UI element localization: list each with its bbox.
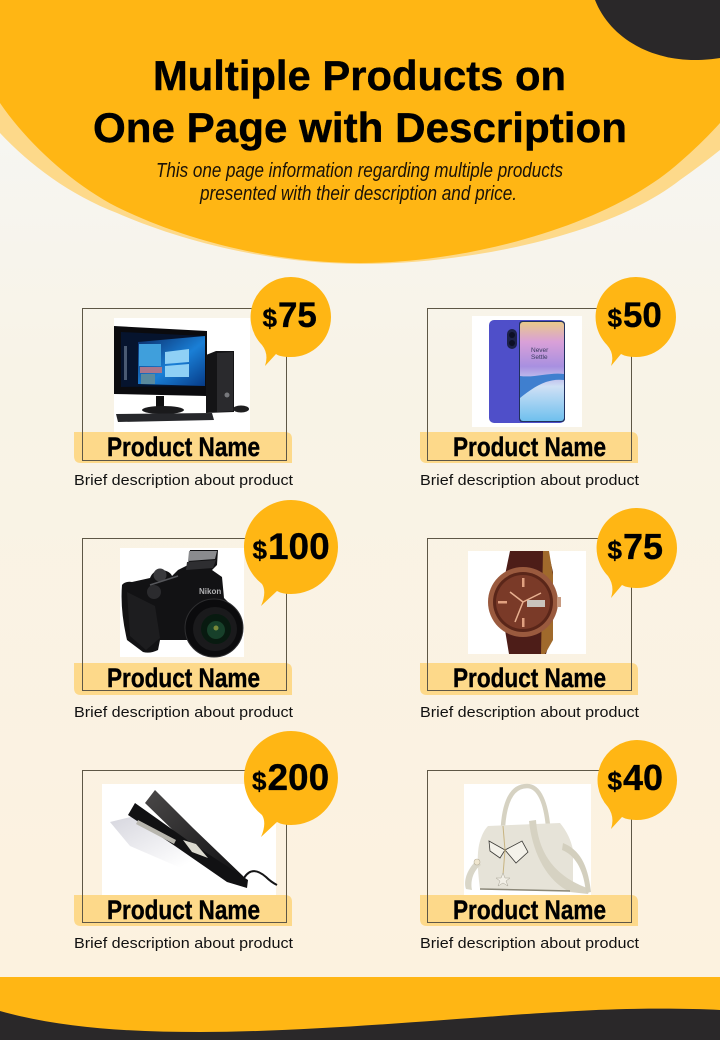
title: One Page with Description: [93, 104, 627, 151]
name bar: [74, 895, 292, 926]
product card: smartphone: [420, 277, 676, 489]
name bar: [74, 663, 292, 695]
title: [93, 52, 627, 151]
description: Brief description about product: [74, 472, 294, 489]
product name: Product Name: [107, 432, 260, 462]
frame: [428, 770, 632, 922]
phone screen text: Never: [531, 347, 549, 354]
price bubble: [244, 731, 338, 837]
camera brand: Nikon: [199, 587, 221, 596]
corner shape: [595, 0, 720, 60]
image: desktop computer: [114, 318, 250, 432]
price bubble: [596, 277, 676, 366]
name bar: [420, 663, 638, 695]
product name: Product Name: [453, 432, 606, 462]
frame: [82, 538, 286, 690]
name bar: [74, 432, 292, 463]
price bubble: $75: [262, 296, 317, 335]
product name: Product Name: [107, 895, 260, 925]
product name: Product Name: [107, 663, 260, 693]
price bubble: $50: [608, 296, 662, 335]
subtitle: presented with their description and price.: [199, 183, 517, 205]
frame: [428, 538, 632, 690]
price bubble: $40: [608, 757, 663, 798]
image: camera: [120, 548, 244, 657]
name bar: [420, 895, 638, 926]
price bubble: [244, 500, 338, 606]
product card: handbag: [420, 740, 677, 952]
footer wave: [0, 1009, 720, 1040]
title: Multiple Products on: [153, 52, 566, 99]
subtitle: [156, 160, 563, 205]
subtitle: This one page information regarding multiple products: [156, 160, 563, 182]
product name: Product Name: [453, 895, 606, 925]
product card: hair straightener: [74, 731, 338, 952]
price bubble: [598, 740, 677, 829]
footer band: [0, 977, 720, 1040]
price bubble: $75: [608, 526, 663, 567]
product card: desktop computer: [74, 277, 331, 489]
phone screen text: Settle: [531, 354, 548, 361]
product card: watch: [420, 508, 677, 721]
frame: [428, 308, 632, 460]
product name: Product Name: [453, 663, 606, 693]
description: Brief description about product: [74, 704, 294, 721]
frame: [82, 308, 286, 460]
frame: [82, 770, 286, 922]
price bubble: $200: [252, 757, 329, 798]
phone screen text: [531, 347, 549, 361]
image: smartphone: [472, 316, 582, 427]
price bubble: $100: [252, 526, 330, 567]
description: Brief description about product: [420, 935, 640, 952]
description: Brief description about product: [420, 704, 640, 721]
price bubble: [597, 508, 677, 598]
description: Brief description about product: [74, 935, 294, 952]
header banner: [0, 0, 720, 264]
price bubble: [251, 277, 331, 366]
image: hair straightener: [102, 784, 277, 895]
image: handbag: [464, 784, 591, 895]
product card: camera: [74, 500, 338, 721]
image: watch: [468, 551, 586, 654]
name bar: [420, 432, 638, 463]
description: Brief description about product: [420, 472, 640, 489]
